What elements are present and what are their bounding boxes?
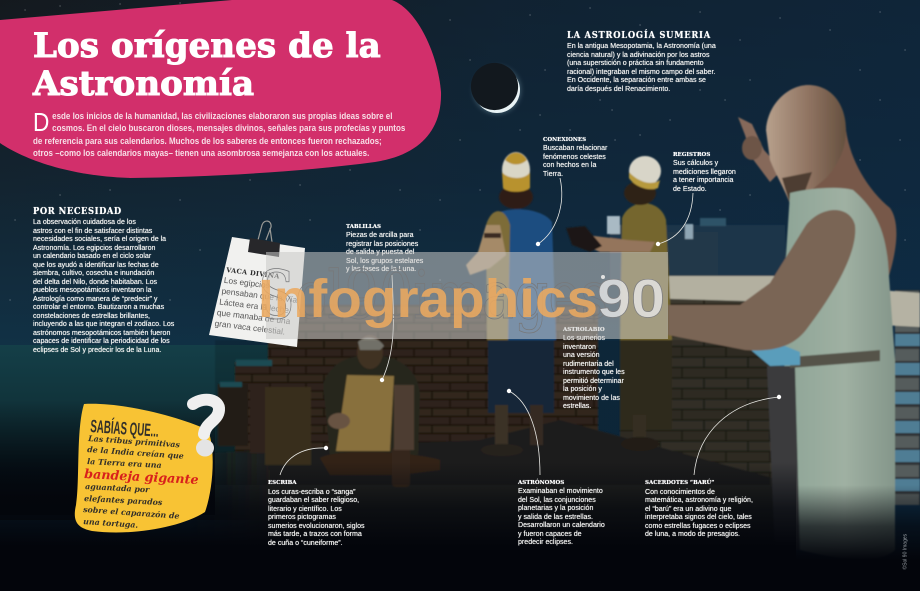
text block: por necesidad: La observación cuidadosa de los [33,217,136,226]
text block: conexiones: con hechos en la [543,160,596,169]
callout: sabías que: una tortuga. [83,517,139,530]
text block: astrónomos: Desarrollaron un calendario [518,520,605,529]
watermark: Sol90images [258,257,608,334]
text block: escriba: primeros pictogramas [268,512,336,521]
text block: por necesidad: controlar el entorno. Bautizaron a muchas [33,302,164,311]
text block: tablillas: y las fases de la Luna. [346,264,416,273]
note card: vaca divina: que manaba de una [216,307,291,326]
text block: tablillas [346,222,424,273]
text block: astrolabio: permitió determinar [563,376,624,384]
text block: astrolabio: instrumento que les [563,367,625,376]
text block: astrolabio: estrellas. [563,401,591,410]
intro text [33,107,405,158]
text block: astrolabio: inventaron [563,342,596,350]
text block: la astrología sumeria: En la antigua Mesopotamia, la Astronomía (una [567,41,716,50]
text block: escriba: guardaban el saber religioso, [268,495,359,504]
note card: vaca divina: Láctea era la leche [219,296,290,315]
text block: la astrología sumeria: racional) integraban el mismo campo del saber. [567,66,715,76]
text block: registros: Sus cálculos y [673,158,718,167]
connector: tablillas [380,275,393,382]
text block: por necesidad: astros con el fin de satisfacer distintas [33,226,152,234]
connector: astrónomos [507,389,540,475]
title: Los orígenes de la [33,26,381,66]
connector: astrolabio [601,275,605,279]
text block: astrolabio: movimiento de las [563,392,620,402]
connector: registros [656,193,693,246]
text block: conexiones: fenómenos celestes [543,152,606,160]
title: Astronomía [33,64,254,104]
text block: astrolabio: ASTROLABIO [563,326,605,332]
text block: escriba: ESCRIBA [268,479,296,486]
text block: sacerdotes barú: el “barú” era un adivino que [645,504,731,512]
text block: por necesidad: del delta del Nilo, donde habitaban. Los [33,276,157,286]
text block: astrolabio: la posición y [563,384,602,393]
floor [190,420,780,560]
text block: por necesidad: que los ayudó a identificar las fechas de [33,260,159,268]
watermark: Infographics [258,269,598,329]
text block: la astrología sumeria: ciencia natural) y la adivinación por los astros [567,50,709,58]
text block: conexiones [542,136,608,178]
connector: conexiones [536,178,562,246]
text block: por necesidad: pueblos mesopotámicos inventaron la [33,285,152,294]
text block: por necesidad: constelaciones de estrellas brillantes, [33,310,150,320]
distant city [607,216,785,280]
text block: registros: REGISTROS [673,150,710,158]
connector: sacerdotes [694,395,781,475]
text block: conexiones: CONEXIONES [543,136,586,142]
text block: tablillas: registrar las posiciones [346,238,418,248]
callout: sabías que: Las tribus primitivas [87,434,181,449]
text block: escriba: más tarde, a trazos con forma [268,529,362,538]
text block: la astrología sumeria: En Occidente, la separación entre ambas se [567,75,706,84]
text block: sacerdotes barú: interpretaba signos del cielo, tales [645,512,752,521]
standing astronomer in olive with clay tablet [566,156,672,451]
text block: conexiones: Buscaban relacionar [543,143,607,152]
text block: por necesidad: siembra, cultivo, cosecha e inundación [33,268,154,277]
text block: por necesidad: Astrología como manera de “predecir” y [33,294,157,302]
text block: escriba [268,479,365,546]
text block: por necesidad: astrónomos mesopotámicos también fueron [33,328,170,336]
intro text: de referencia para sus calendarios. Muchos de los saberes de entonces fueron rechazados; [33,136,382,146]
text block: sacerdotes barú: como estrellas fugaces o eclipses [645,520,751,530]
standing astronomer in blue [466,152,556,456]
callout: sabías que: la Tierra era una [87,457,162,470]
text block: registros: de Estado. [673,184,707,192]
text block: astrolabio: una versión [563,350,600,359]
text block: sacerdotes barú: matemática, astronomía y religión, [645,495,753,504]
icon: binder clip [248,221,280,257]
note card: vaca divina: pensaban que la Vía [221,286,298,305]
connector: escriba [280,446,328,475]
crescent moon [471,63,521,114]
intro text: D [33,107,49,137]
text block: astrónomos: y fueron capaces de [518,528,582,538]
text block: sacerdotes barú: SACERDOTES “BARÚ” [645,479,714,486]
text block: astrónomos: Examinaban el movimiento [518,486,603,495]
text block: registros: a tener importancia [673,175,733,184]
note card: vaca divina: Los egipcios [223,275,270,290]
text block: sacerdotes barú: Con conocimientos de [645,486,715,496]
text block: escriba: sumerios evolucionaron, siglos [268,520,365,530]
text block: astrónomos: planetarias y la posición [518,503,593,512]
note card: vaca divina: VACA DIVINA [225,266,281,281]
text block: tablillas: Piezas de arcilla para [346,230,414,239]
callout: sabías que: elefantes parados [84,494,163,507]
text block: astrónomos: del Sol, las conjunciones [518,494,596,504]
sea horizon [0,345,320,520]
text block: por necesidad: necesidades sociales, sería el origen de la [33,234,166,243]
text block: por necesidad: eclipses de Sol y predecir los de la Luna. [33,344,161,354]
callout: sabías que: de la India creían que [87,445,184,461]
text block: astrónomos: predecir eclipses. [518,537,573,546]
text block: por necesidad: un calendario basado en el ciclo solar [33,251,151,260]
watermark: 90 [597,269,665,329]
text block: la astrología sumeria: (una superstición o práctica sin fundamento [567,58,704,67]
text block: astrónomos [518,478,605,546]
seated scribe with clay tablet [320,335,440,487]
text block: tablillas: de salida y puesta del [346,247,414,256]
callout: sabías que: aguantada por [85,482,150,494]
text block: por necesidad: capaces de identificar la periodicidad de los [33,336,170,345]
image credit: ©Sol 90 Images [902,534,908,570]
text block: conexiones: Tierra. [543,168,563,178]
icon: question mark [193,400,219,456]
intro text: cosmos. En el cielo buscaron dioses, mensajes divinos, señales para sus profecías y puntos [52,123,405,133]
note card: vaca divina: gran vaca celestial. [214,318,286,337]
text block: sacerdotes barú: de luna, a modo de presagios. [645,529,740,538]
bottom dark fade [0,400,920,591]
text block: por necesidad: POR NECESIDAD [33,207,122,217]
text block: por necesidad: Astronomía. Los egipcios desarrollaron [33,242,155,252]
text block: registros [672,150,736,192]
title [32,26,381,104]
callout: sabías que: bandeja gigante [84,466,199,487]
text block: tablillas: Sol, los grupos estelares [346,256,423,264]
callout: sabías que: SABÍAS QUE... [90,416,160,442]
intro text: otros –como los calendarios mayas– tienen una asombrosa semejanza con los actuales. [33,148,369,158]
text block: astrolabio [562,326,625,410]
text block: escriba: de cuña o “cuneiforme”. [268,538,343,546]
centre brick wall [218,305,598,470]
callout: sabías que: sobre el caparazón de [83,505,180,521]
text block: escriba: literario y científico. Los [268,504,342,512]
text block: por necesidad [32,206,174,354]
text block: la astrología sumeria: daría después del Renacimiento. [567,84,670,92]
text block: por necesidad: incluyendo a las que integran el zodíaco. Los [33,319,174,328]
text block: registros: mediciones llegaron [673,166,736,176]
leaning clay tablets [250,385,311,465]
far parapet wall [620,276,920,505]
text block: astrónomos: y salida de las estrellas. [518,512,593,520]
priest pointing at the sky [668,85,896,559]
text block: sacerdotes barú [644,478,753,538]
starfield [10,3,905,300]
text block: la astrología sumeria [566,28,716,93]
text block: la astrología sumeria: LA ASTROLOGÍA SUMERIA [567,31,711,41]
dim shadow over lower figures [215,340,770,485]
intro text: esde los inicios de la humanidad, las civilizaciones elaboraron sus propias ideas sobre el [52,111,392,121]
text block: astrónomos: ASTRÓNOMOS [518,478,564,486]
text block: astrolabio: Los sumerios [563,333,605,342]
text block: astrolabio: rudimentaria del [563,358,614,368]
text block: tablillas: TABLILLAS [346,222,381,230]
text block: escriba: Los curas-escriba o “sanga” [268,486,356,496]
